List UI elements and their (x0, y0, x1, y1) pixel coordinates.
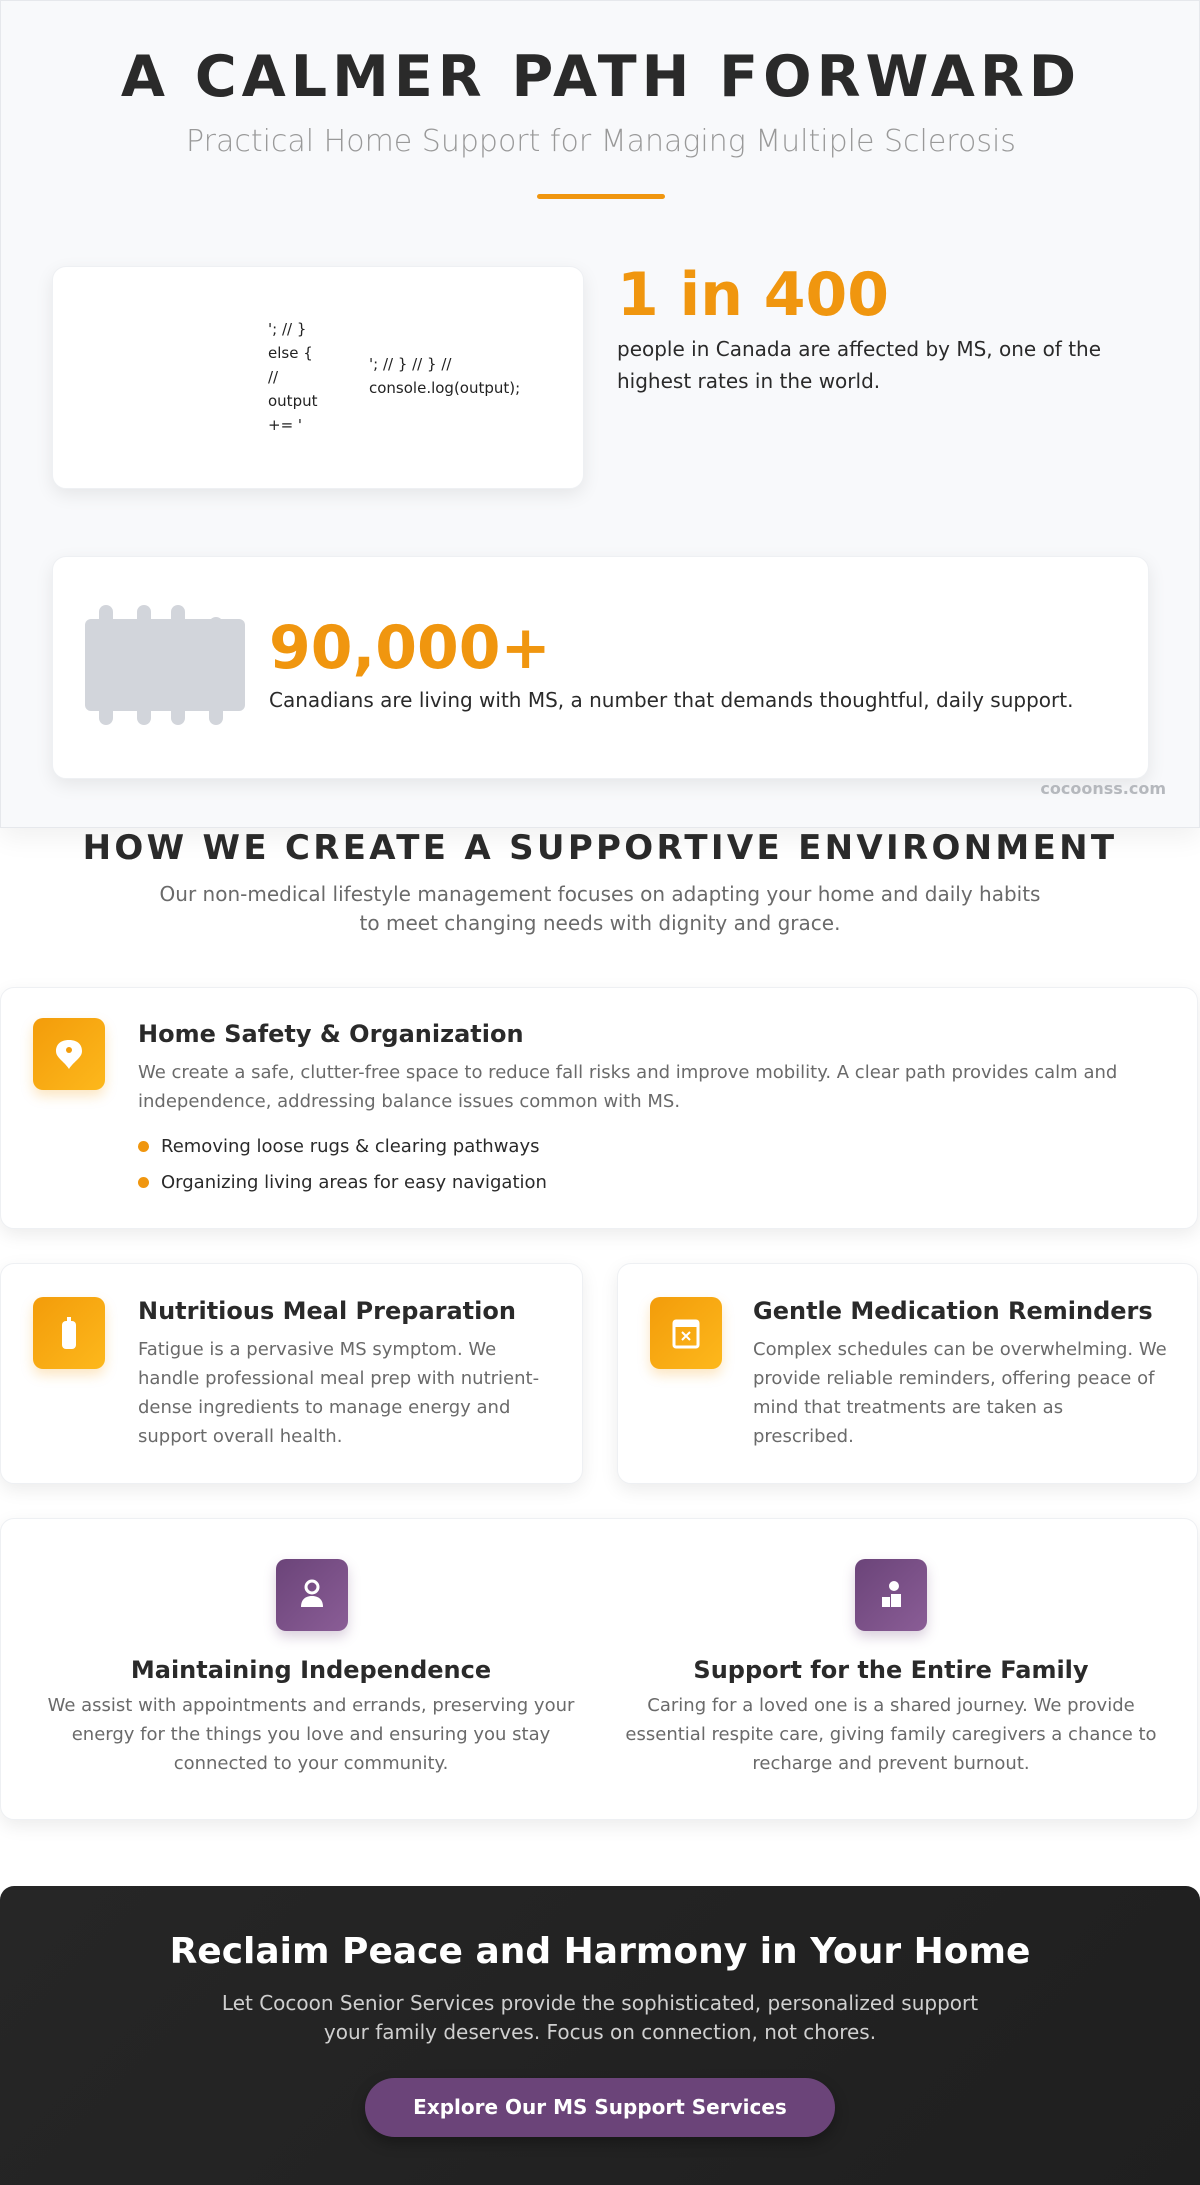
bullets (138, 1136, 547, 1193)
card: code stat (52, 266, 584, 489)
heading: Home Safety & Organization (138, 1020, 524, 1048)
column: independence: We assist with appointments and errands, preserving your energy for the things you love and ensuring you stay connected to your community. (48, 1695, 574, 1774)
panel: home safety (0, 987, 1198, 1229)
panel: meal prep (0, 1263, 583, 1484)
bullets: Removing loose rugs & clearing pathways (161, 1136, 539, 1157)
description: Fatigue is a pervasive MS symptom. We handle professional meal prep with nutrient-dense ingredients to manage energy and support overall health. (138, 1339, 539, 1447)
stat: 1 in 400: people in Canada are affected by MS, one of the highest rates in the world. (617, 337, 1101, 393)
stat number: 90,000+ (269, 613, 551, 683)
icon: family (855, 1559, 927, 1631)
stat: 1 in 400 (617, 260, 1101, 393)
card: 90,000+ (52, 556, 1149, 779)
heading: Gentle Medication Reminders (753, 1297, 1153, 1325)
icon: bottle (33, 1297, 105, 1369)
accent bar (537, 194, 665, 199)
heading: Nutritious Meal Preparation (138, 1297, 516, 1325)
bullets: Organizing living areas for easy navigation (161, 1172, 547, 1193)
code text: += ' (268, 416, 302, 434)
column: family: Support for the Entire Family (693, 1656, 1089, 1684)
CTA text (222, 1991, 978, 2044)
panel: medication (617, 1263, 1198, 1484)
column: independence (48, 1559, 574, 1774)
section subtitle: to meet changing needs with dignity and grace. (360, 911, 840, 935)
source: cocoonss.com (1040, 779, 1166, 798)
subtitle: Practical Home Support for Managing Multiple Sclerosis (186, 124, 1016, 159)
column: family: Caring for a loved one is a shared journey. We provide essential respite care, giving family caregivers a chance to recharge and prevent burnout. (625, 1695, 1157, 1774)
code text: '; // } (268, 320, 306, 338)
CTA button: Explore Our MS Support Services (413, 2095, 787, 2119)
code text: // (268, 368, 278, 386)
card: code stat: console.log(output); (369, 379, 520, 397)
description: We create a safe, clutter-free space to reduce fall risks and improve mobility. A clear path provides calm and independence, addressing balance issues common with MS. (138, 1062, 1117, 1112)
icon: shield (33, 1018, 105, 1090)
card: code stat: '; // } // } // (369, 355, 451, 373)
code text: else { (268, 344, 313, 362)
section heading: HOW WE CREATE A SUPPORTIVE ENVIRONMENT (83, 828, 1117, 868)
panel: call to action (0, 1886, 1200, 2185)
CTA button (365, 2078, 835, 2137)
icon: calendar (650, 1297, 722, 1369)
title: A CALMER PATH FORWARD (121, 44, 1081, 110)
code text (268, 320, 318, 434)
panel: independence and family (0, 1518, 1198, 1820)
header panel (0, 0, 1200, 828)
description: Complex schedules can be overwhelming. We provide reliable reminders, offering peace of mind that treatments are taken as (753, 1339, 1167, 1418)
section subtitle: Our non-medical lifestyle management focuses on adapting your home and daily habits (160, 882, 1040, 906)
CTA text: your family deserves. Focus on connection, not chores. (324, 2020, 876, 2044)
stat text: Canadians are living with MS, a number that demands thoughtful, daily support. (269, 688, 1073, 712)
section subtitle (160, 882, 1040, 935)
column: independence: Maintaining Independence (131, 1656, 491, 1684)
code text: output (268, 392, 317, 410)
icon: gray blob (85, 605, 245, 725)
stat: 1 in 400: 1 in 400 (617, 260, 889, 330)
description: prescribed. (753, 1426, 854, 1447)
CTA heading: Reclaim Peace and Harmony in Your Home (170, 1931, 1030, 1972)
column: family (625, 1559, 1157, 1774)
CTA text: Let Cocoon Senior Services provide the sophisticated, personalized support (222, 1991, 978, 2015)
icon: person (276, 1559, 348, 1631)
